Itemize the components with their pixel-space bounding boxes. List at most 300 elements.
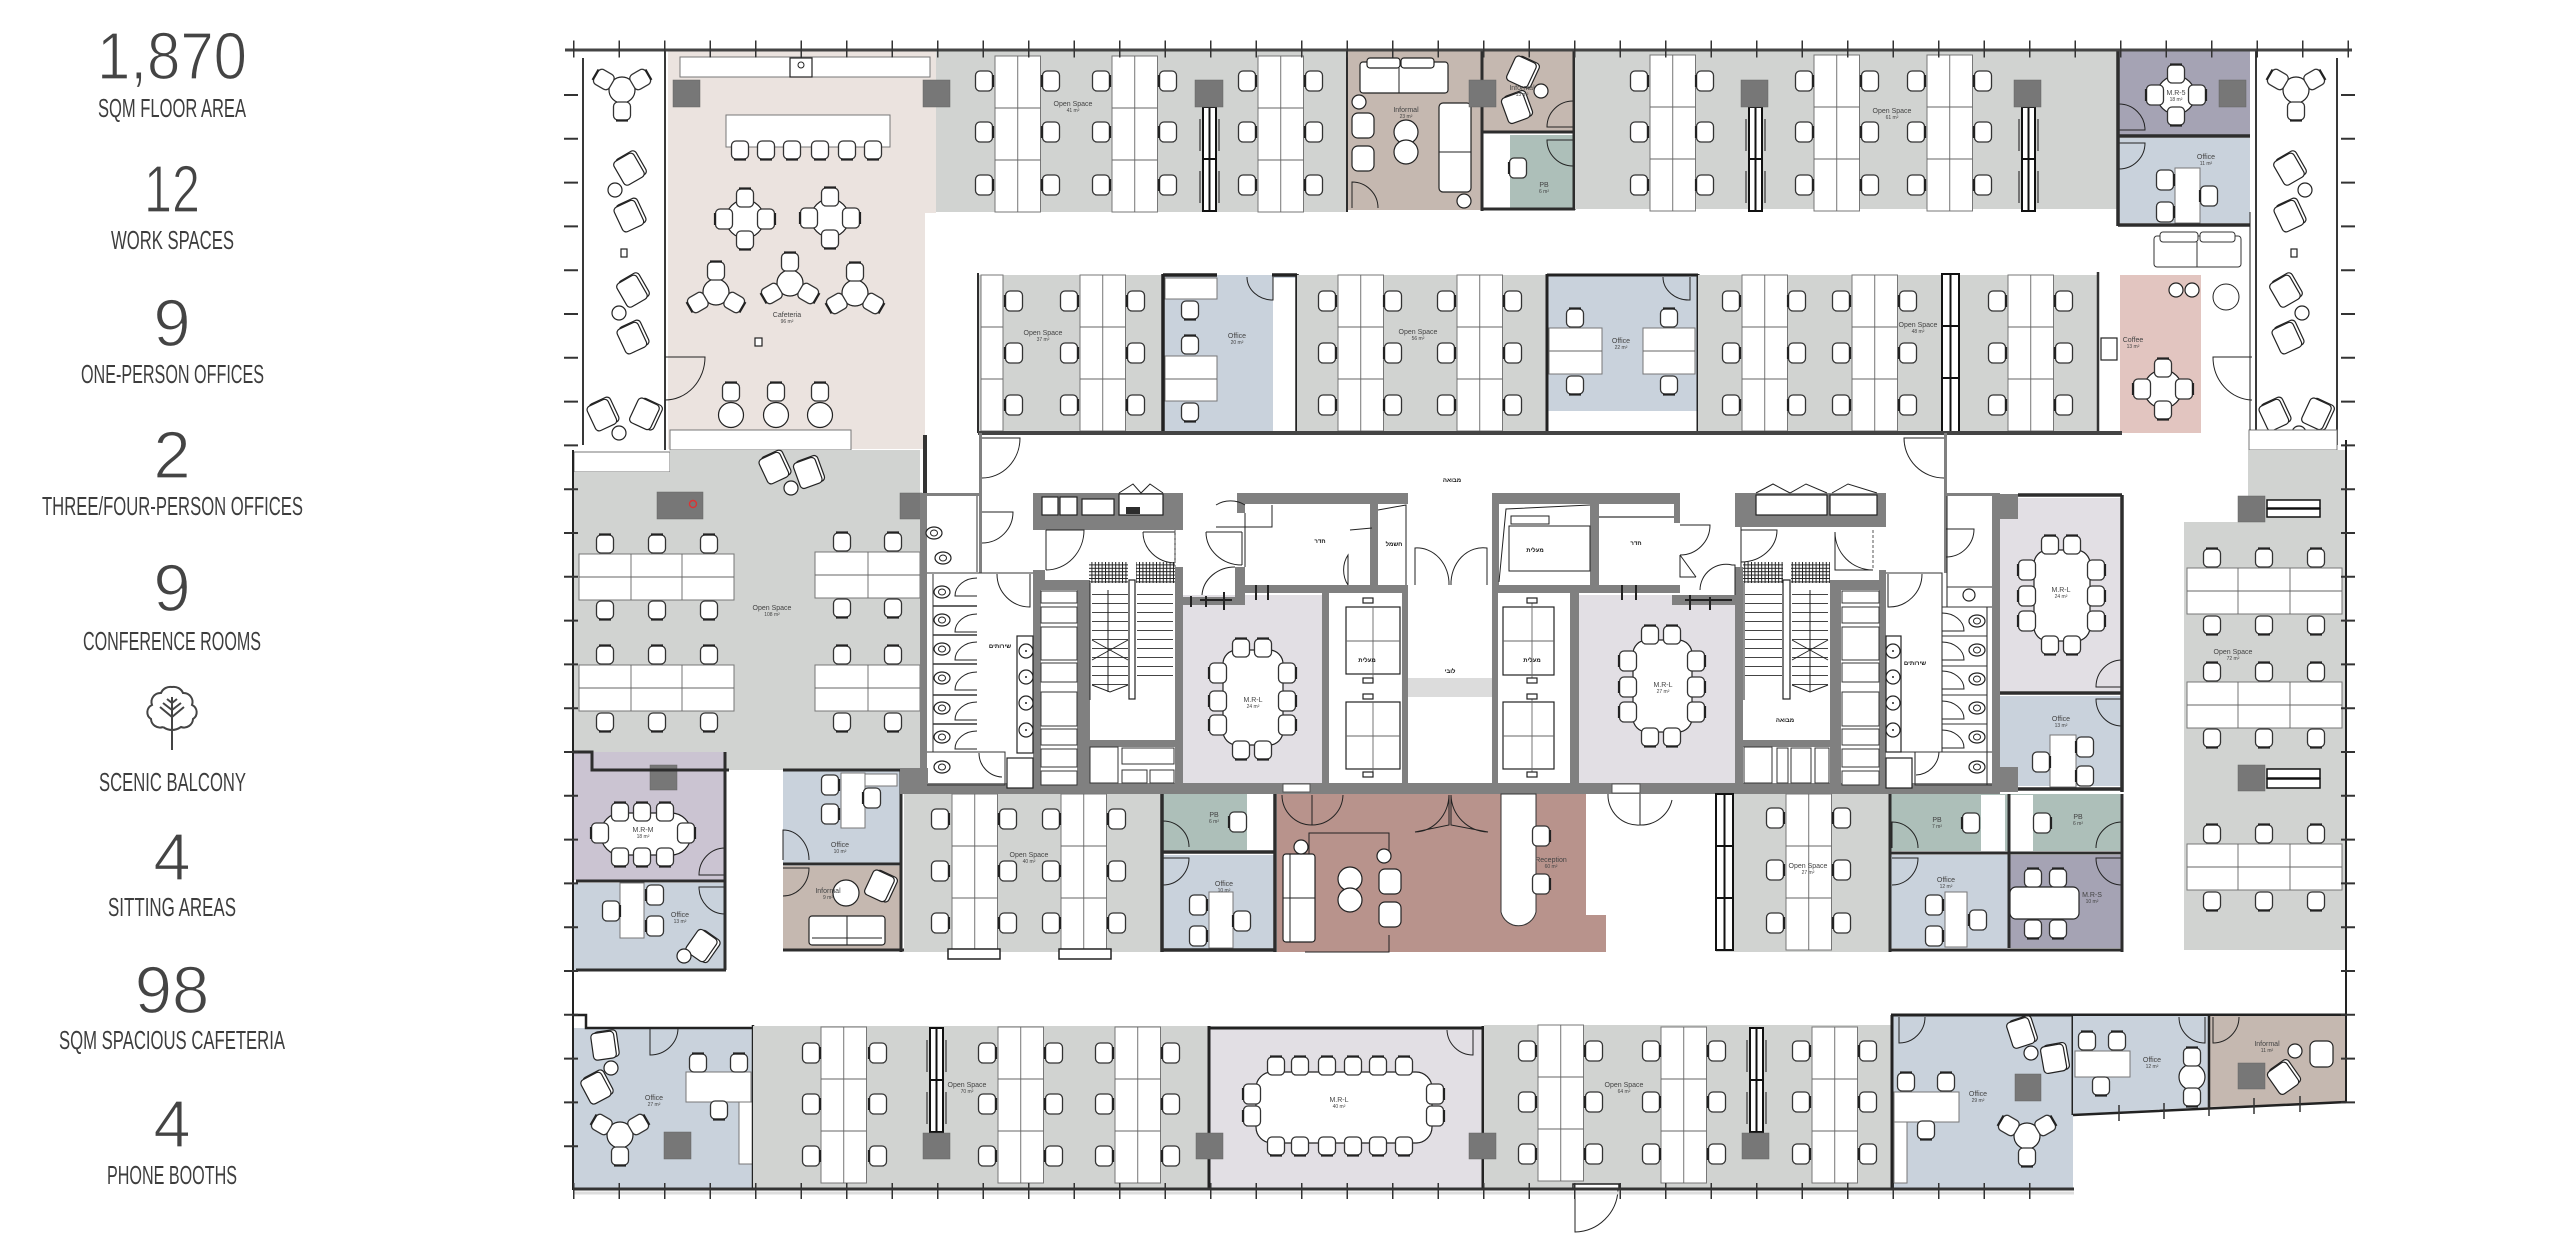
stat: three/four-person offices <box>42 418 303 521</box>
room label: Open Space <box>1010 852 1048 859</box>
marker <box>755 338 762 346</box>
icon: tree <box>147 687 197 750</box>
door <box>783 830 809 860</box>
storage units <box>948 949 1111 959</box>
room label: 13 m² <box>1516 92 1529 98</box>
room label: 10 m² <box>834 849 847 855</box>
room label: 12 m² <box>2146 1064 2159 1070</box>
stat: scenic balcony with tree icon: SCENIC BALCONY <box>99 767 246 797</box>
room label: 61 m² <box>1886 115 1899 121</box>
walls <box>2118 50 2250 226</box>
sofa vertical <box>1439 103 1471 192</box>
door <box>1663 277 1690 300</box>
room label: Office <box>1937 877 1955 884</box>
walls <box>1163 274 1297 432</box>
panel: office row 2 B <box>1547 274 1698 432</box>
room label: 96 m² <box>781 319 794 325</box>
armchairs <box>1379 869 1401 927</box>
panel: meeting room M.R-S <box>1890 794 2122 952</box>
room label: Informal <box>1509 85 1535 92</box>
room label: Open Space <box>948 1082 986 1089</box>
seating cluster <box>1996 1113 2058 1166</box>
wall <box>1346 50 1348 212</box>
chairs <box>1318 291 1522 415</box>
panel: open space south core <box>1716 794 1890 952</box>
armchairs <box>1352 113 1374 171</box>
floor plan <box>565 49 2352 1232</box>
desk and chairs <box>822 773 897 828</box>
room label: 56 m² <box>1412 336 1425 342</box>
room label: Office <box>1969 1091 1987 1098</box>
stat: work spaces: 12 <box>144 152 200 227</box>
room label: Informal <box>815 888 841 895</box>
central lobby <box>1415 478 1487 675</box>
door <box>783 868 809 896</box>
wall panel <box>1586 794 1606 915</box>
seating cluster <box>589 1112 651 1166</box>
building outline: walls and mullions <box>565 49 2352 1193</box>
chairs <box>802 1043 1180 1166</box>
stat: one-person offices: 9 <box>153 286 191 361</box>
room label: M.R-L <box>2051 587 2071 594</box>
panel: row 2 base wall <box>978 431 2122 435</box>
room label: 10 m² <box>2086 899 2099 905</box>
lounge seating <box>585 149 664 440</box>
room label: 64 m² <box>1618 1089 1631 1095</box>
elevators: מעלית <box>1358 656 1376 664</box>
cabinet <box>1273 278 1297 431</box>
room label: 11 m² <box>2200 161 2213 167</box>
table and chairs <box>2018 536 2105 654</box>
panel: meeting room M.R-L south <box>1209 1026 1483 1189</box>
walls <box>1547 274 1698 432</box>
stat: conference rooms <box>83 551 261 656</box>
stat: one-person offices <box>81 286 264 389</box>
column <box>2238 1063 2265 1089</box>
room label: 13 m² <box>2055 723 2068 729</box>
panel: open space row 2 east <box>1698 274 2098 432</box>
room label: Cafeteria <box>773 312 801 319</box>
marker <box>2291 249 2297 257</box>
door <box>1447 1030 1473 1055</box>
chairs <box>1566 308 1678 394</box>
room label: M.R-L <box>1329 1097 1349 1104</box>
column with marker <box>657 492 922 519</box>
door <box>2119 143 2145 169</box>
round table with chairs <box>2179 1048 2205 1106</box>
doors <box>1892 822 2122 848</box>
desk and chairs <box>1894 1072 1959 1183</box>
room label: Office <box>831 842 849 849</box>
walls <box>1890 794 2122 952</box>
walls <box>576 752 726 970</box>
room label: 40 m² <box>1333 1104 1346 1110</box>
room labels <box>1932 814 2083 830</box>
service box <box>2249 430 2337 450</box>
toilets east: שירותים <box>1904 661 1926 667</box>
room label: Office <box>1215 881 1233 888</box>
chairs <box>1722 291 2072 415</box>
sidebar: key figures <box>42 19 303 1190</box>
chairs <box>1962 813 2051 833</box>
meeting room M.R-L east: 27 m² <box>1657 689 1670 695</box>
door <box>2179 1017 2205 1043</box>
panel: office far south-east <box>2073 1016 2209 1114</box>
toilets east <box>1886 496 1992 788</box>
room label: PB <box>1539 182 1549 189</box>
room label: 6 m² <box>1539 189 1549 195</box>
structural columns <box>923 80 1496 1159</box>
room label: Reception <box>1535 857 1567 864</box>
room label: Open Space <box>1399 329 1437 336</box>
partition <box>1716 794 1733 950</box>
lounge seating <box>757 449 826 495</box>
reception chairs <box>1532 826 1550 894</box>
room label: 72 m² <box>2227 656 2240 662</box>
lounge <box>579 1029 620 1105</box>
room label: Office <box>645 1095 663 1102</box>
column <box>664 1132 691 1159</box>
stat: phone booths: 4 <box>153 1087 191 1162</box>
panel: meeting room M.R-5 <box>2118 50 2250 135</box>
room label: PB <box>1209 812 1219 819</box>
desk <box>1786 794 1832 950</box>
room label: 108 m² <box>764 612 780 618</box>
sofa <box>809 916 885 945</box>
desk and chairs <box>1190 892 1250 948</box>
column <box>1999 494 2018 519</box>
chair <box>1509 158 1526 178</box>
panel: corridor sofa <box>2154 232 2241 267</box>
chairs <box>1518 1041 1876 1164</box>
partition <box>1942 274 1959 432</box>
chairs <box>2204 548 2324 910</box>
lounge <box>863 868 899 904</box>
sofa <box>1360 58 1448 93</box>
bar table with stools <box>726 115 890 160</box>
room label: 23 m² <box>1400 114 1413 120</box>
seating cluster <box>591 67 653 120</box>
desks <box>1742 275 2054 431</box>
central lobby: מבואה <box>1443 478 1461 484</box>
stat: sitting areas: SITTING AREAS <box>108 892 236 922</box>
service rooms centre east: חדר <box>1630 541 1642 547</box>
service counter <box>670 430 851 450</box>
desk and chairs <box>686 1054 753 1164</box>
room label: 60 m² <box>1545 864 1558 870</box>
corridor doors <box>982 438 1944 543</box>
column <box>2219 80 2246 107</box>
panel: office north-east <box>2118 50 2250 226</box>
lobby and shafts east <box>1741 484 1879 785</box>
elevators: מעלית <box>1523 656 1541 664</box>
panel: open space south 2 <box>1484 1025 1891 1189</box>
room labels: PB <box>2073 814 2083 821</box>
lobby and shafts west <box>1041 484 1175 785</box>
panel: open space row 2 west <box>977 273 1163 433</box>
chairs <box>976 71 1322 195</box>
dining tables <box>685 188 886 316</box>
room label: 27 m² <box>1802 870 1815 876</box>
structural walls <box>900 433 2000 794</box>
lounge seating <box>2257 149 2336 440</box>
desks <box>981 275 1126 431</box>
marker <box>621 249 627 257</box>
counter with sink <box>2098 272 2120 432</box>
door <box>1547 101 1573 127</box>
column <box>650 765 677 790</box>
table and chairs <box>591 802 695 866</box>
door <box>2213 1017 2239 1043</box>
panel: cafeteria <box>665 50 936 450</box>
walls <box>2073 1015 2346 1115</box>
coffee tables <box>1352 95 1471 208</box>
elevators <box>1283 598 1554 792</box>
central lobby: לובי <box>1445 667 1456 675</box>
phone partition and column <box>1195 80 1223 211</box>
room label: Informal <box>1393 107 1419 114</box>
desk and chairs <box>602 883 664 938</box>
door <box>2096 699 2122 726</box>
stat: phone booths: PHONE BOOTHS <box>107 1160 237 1190</box>
toilets west <box>926 496 1033 788</box>
panel: informal west <box>783 770 904 952</box>
cabinets <box>1981 795 2033 851</box>
room label: M.R-M <box>632 827 654 834</box>
room label: 13 m² <box>674 919 687 925</box>
panel: open space south-west core <box>904 794 1161 959</box>
panel: office south-east <box>1891 1015 2346 1189</box>
room label: Office <box>2052 716 2070 723</box>
desks <box>2187 568 2342 890</box>
panel: open space north 1 <box>936 50 1346 212</box>
stat: three/four-person offices: 2 <box>153 418 191 493</box>
room label: 20 m² <box>1231 340 1244 346</box>
coffee tables <box>1294 840 1391 912</box>
door <box>650 1028 678 1055</box>
desks <box>821 1027 1160 1183</box>
round table <box>833 880 859 906</box>
rug <box>1305 833 1389 952</box>
door <box>1547 140 1573 166</box>
lounge <box>677 927 722 965</box>
walls <box>1162 794 1275 952</box>
chairs <box>1630 71 1992 195</box>
room label: Open Space <box>1899 322 1937 329</box>
stat: cafeteria: 98 <box>135 953 209 1028</box>
partition and column <box>923 1028 950 1159</box>
table and chairs <box>2146 64 2206 126</box>
room labels: 7 m² <box>1932 824 1942 830</box>
service rooms centre west: חדר <box>1314 539 1326 545</box>
desks <box>1549 328 1695 374</box>
table and chairs <box>1243 1056 1444 1156</box>
wall <box>977 273 979 433</box>
stat: work spaces: WORK SPACES <box>111 225 234 255</box>
desks <box>952 794 1106 950</box>
stat: three/four-person offices: THREE/FOUR-PERSON OFFICES <box>42 491 303 521</box>
room label: Office <box>2197 154 2215 161</box>
chairs <box>932 809 1126 933</box>
panel: phone booth south <box>1162 794 1272 850</box>
desk and chairs <box>2032 735 2094 787</box>
room label: 18 m² <box>637 834 650 840</box>
stat: floor area: SQM FLOOR AREA <box>98 93 246 123</box>
walls <box>574 1015 753 1189</box>
panel: coffee corner <box>2098 272 2201 433</box>
sofa <box>1283 854 1315 942</box>
room label: Informal <box>2254 1041 2280 1048</box>
walls <box>1482 50 1575 211</box>
room label: 10 m² <box>1218 888 1231 894</box>
walls <box>1209 1026 1483 1189</box>
stat: conference rooms: 9 <box>153 551 191 626</box>
phone partitions and columns <box>1741 80 2041 211</box>
stat: sitting areas: 4 <box>153 820 191 895</box>
desks <box>995 56 1304 212</box>
room label: Office <box>2143 1057 2161 1064</box>
room label: 48 m² <box>1912 329 1925 335</box>
chairs <box>1005 291 1144 415</box>
room label: Open Space <box>1789 863 1827 870</box>
seats with round tables <box>718 382 832 428</box>
meeting room M.R-L west: M.R-L <box>1243 697 1263 704</box>
room label: Open Space <box>1024 330 1062 337</box>
meeting room M.R-L east <box>1579 595 1735 783</box>
door <box>1352 182 1378 208</box>
panel: office east core <box>1999 495 2122 792</box>
walls <box>1891 1015 2346 1189</box>
room label: M.R-5 <box>2166 90 2186 97</box>
room label: 37 m² <box>1037 337 1050 343</box>
room label: Open Space <box>2214 649 2252 656</box>
panel: office south-west <box>574 1015 753 1189</box>
panel: office C <box>783 770 901 863</box>
room labels: PB <box>1932 817 1942 824</box>
room label: Open Space <box>1873 108 1911 115</box>
room label: Office <box>671 912 689 919</box>
door <box>1247 277 1273 300</box>
stairs west <box>1089 562 1175 783</box>
room label: Open Space <box>753 605 791 612</box>
cabinet <box>1247 795 1272 850</box>
meeting room M.R-L west <box>1183 595 1322 783</box>
stat: floor area: 1,870 <box>97 19 247 94</box>
panel: phone booths east <box>1890 794 2122 851</box>
room label: 12 m² <box>1940 884 1953 890</box>
door <box>2096 660 2122 687</box>
stools <box>2169 283 2199 297</box>
room label: M.R-S <box>2082 892 2102 899</box>
chair <box>1229 812 1246 832</box>
room label: 41 m² <box>1067 108 1080 114</box>
room label: 40 m² <box>1023 859 1036 865</box>
room labels: 6 m² <box>2073 821 2083 827</box>
room label: 6 m² <box>1209 819 1219 825</box>
doors <box>1282 795 1488 832</box>
panel: open space row 2 centre <box>1297 275 1547 431</box>
panel: left balcony <box>574 50 670 472</box>
walls <box>2000 495 2122 792</box>
service rooms centre west <box>1191 501 1406 610</box>
service rooms centre west: חשמל <box>1386 540 1402 548</box>
desks <box>1338 275 1502 431</box>
room label: 22 m² <box>1615 345 1628 351</box>
desks <box>1538 1025 1858 1183</box>
stat: work spaces <box>111 152 234 255</box>
desks <box>1650 55 1972 211</box>
panel: office west <box>574 752 726 970</box>
panel: informal far south-east <box>2073 1015 2346 1115</box>
service rooms centre east <box>1499 505 1735 610</box>
desks <box>1165 278 1217 401</box>
room label: Coffee <box>2123 337 2143 344</box>
room label: 18 m² <box>2170 97 2183 103</box>
panel: open space west <box>574 449 922 770</box>
door <box>665 357 705 400</box>
room label: 27 m² <box>648 1102 661 1108</box>
room label: Open Space <box>1054 101 1092 108</box>
room label: Open Space <box>1605 1082 1643 1089</box>
meeting room M.R-L east: M.R-L <box>1653 682 1673 689</box>
meeting room M.R-L west: 24 m² <box>1247 704 1260 710</box>
stat: scenic balcony with tree icon <box>99 687 246 797</box>
panel: phone booth north <box>1482 50 1575 211</box>
desk and chairs <box>2156 168 2218 223</box>
door <box>699 848 725 875</box>
panel: informal lounge north <box>1346 50 1482 212</box>
room label: 9 m² <box>823 895 833 901</box>
room label: 13 m² <box>2127 344 2140 350</box>
panel: entrance door south <box>1573 1184 1619 1232</box>
partition and column <box>1742 1028 1769 1159</box>
chairs <box>596 532 902 732</box>
panel: reception <box>1277 794 1606 952</box>
table and chairs <box>2133 358 2193 420</box>
panel: building core <box>900 433 2000 794</box>
service rooms centre east: מעלית <box>1526 546 1544 554</box>
panel: meeting room M.R-M <box>574 752 729 880</box>
walls <box>783 770 904 952</box>
stat: one-person offices: ONE-PERSON OFFICES <box>81 359 264 389</box>
panel: office south-east core <box>1890 855 2009 948</box>
room label: 70 m² <box>961 1089 974 1095</box>
room label: Office <box>1612 338 1630 345</box>
door <box>1163 858 1189 885</box>
door <box>699 887 725 914</box>
stairs east: מבואה <box>1776 718 1794 724</box>
toilets west: שירותים <box>989 644 1011 650</box>
chairs <box>1182 301 1198 422</box>
door <box>1899 1017 1925 1043</box>
desk and chairs <box>2075 1032 2130 1096</box>
panel: open space east <box>2184 450 2346 950</box>
panel: office south core <box>1162 794 1275 952</box>
stat: cafeteria <box>59 953 285 1055</box>
room label: 11 m² <box>2261 1048 2274 1054</box>
lounge chairs <box>1500 54 1548 125</box>
panel: informal small north <box>1482 50 1574 132</box>
reception desk <box>1501 794 1536 926</box>
door <box>1892 858 1918 885</box>
door <box>2096 858 2122 885</box>
stat: conference rooms: CONFERENCE ROOMS <box>83 626 261 656</box>
column <box>673 80 700 107</box>
counter with sink <box>680 57 930 77</box>
stat: floor area <box>97 19 247 123</box>
lounge <box>2265 1041 2333 1096</box>
seating cluster <box>2265 67 2327 120</box>
